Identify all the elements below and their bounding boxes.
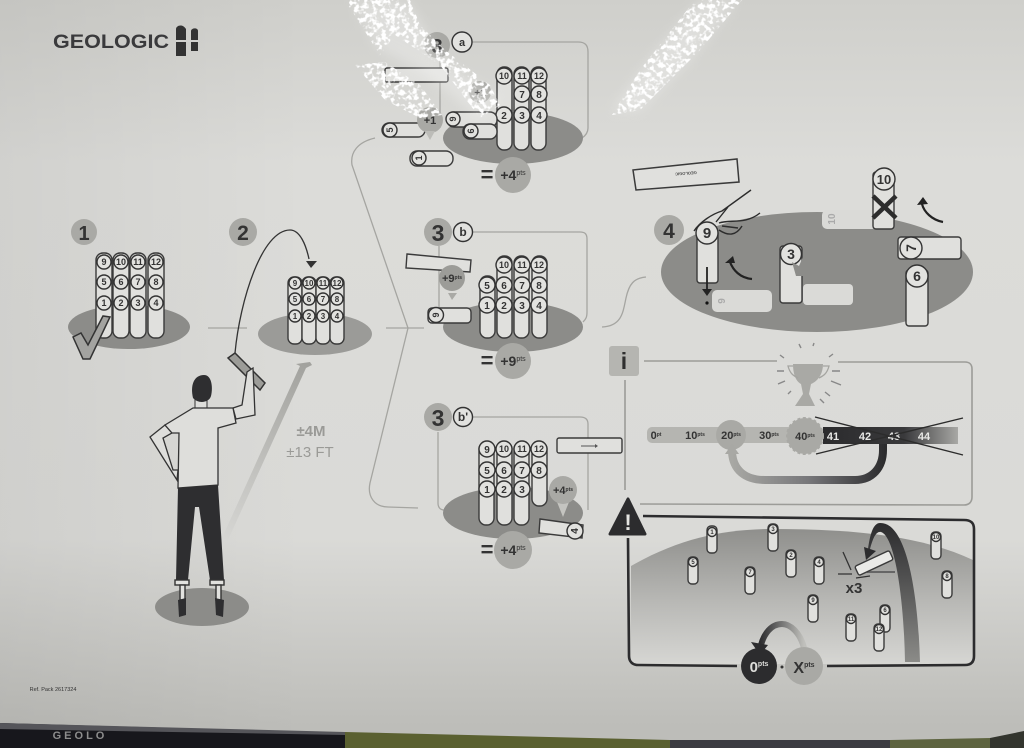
score bar: 30 [759,430,771,442]
branch connector lines [208,138,646,508]
pins remaining: 8 [536,281,542,292]
pins remaining: 10 [499,71,509,81]
score bar: 44 [918,431,931,443]
zero points circle [741,648,777,684]
check mark [73,316,110,359]
baton impact x3: x3 [846,580,862,597]
hand [694,190,760,234]
badge 3b: b [459,225,467,239]
pins remaining: 7 [519,466,525,477]
pins remaining: 11 [517,444,527,454]
distance label: ±13 FT [286,444,334,461]
pins remaining: 6 [501,281,507,292]
return arrow to zero [751,624,804,655]
pin 6: 6 [913,268,921,284]
ground ellipse [443,302,583,352]
ground ellipse [258,313,372,355]
scattered pins: 7 [748,570,752,576]
pins remaining: 4 [536,111,542,122]
panel frame [440,42,588,138]
partial text under the sheet: GEOLO [53,730,107,742]
distance arrow [222,362,312,540]
pins 1 to 12 [288,277,344,344]
fallen pins: 1 [414,155,424,161]
pins remaining: 5 [484,466,490,477]
scattered pins: 9 [811,598,815,604]
score bar: 0 [651,430,657,442]
pins remaining: 9 [484,445,490,456]
fallen pins [382,112,497,166]
scattered pins: 6 [883,608,887,614]
zero points circle: 0 [750,659,758,676]
trousers [176,485,224,580]
pins remaining: 8 [536,466,542,477]
pins remaining [479,441,547,525]
X points circle [785,647,823,685]
pin 10 crossed out [873,168,896,229]
big throw arc [864,523,920,662]
badge 3b prime: 3 [432,405,444,431]
info icon: i [621,348,627,374]
pins 1 to 12: 8 [153,277,159,287]
badge 3a: 3 [431,36,443,58]
score bar: pts [733,432,741,438]
pins 1 to 12: 10 [305,279,314,288]
score bar: pts [771,432,779,438]
pins 1 to 12: 9 [101,257,107,267]
reference code: Ref. Pack 2617324 [30,687,76,693]
pins 1 to 12: 12 [333,279,342,288]
pins remaining: 11 [517,260,527,270]
pins remaining: 2 [501,111,507,122]
warning panel: bust rule [610,499,974,685]
panel frame [628,516,974,666]
scattered pins: 11 [848,617,855,623]
score bar: pts [807,433,815,439]
+9 score marker: pts [455,275,462,281]
badge 4 [654,215,684,245]
+4 score marker: pts [566,487,573,493]
40 pts badge [787,418,823,454]
+1 score marker: +1 [424,115,436,127]
scattered pins: 5 [691,560,695,566]
pins 1 to 12: 2 [118,298,124,308]
raised arm [233,368,255,419]
score bar: 41 [827,431,839,443]
step 3b: several pins [406,218,587,379]
pin 9 being placed [696,222,718,283]
fallen pins: 9 [448,116,458,122]
pins remaining: 4 [536,301,542,312]
pins remaining: 7 [519,281,525,292]
pins remaining: 1 [484,485,490,496]
ghost pins: 9 [717,298,728,304]
baton [406,254,471,272]
pins 1 to 12: 11 [319,279,328,288]
bottom edge of sheet [0,723,1024,748]
step 4: stand pins back up [654,168,973,332]
fallen pin 9 [428,308,471,323]
+4 score marker: +4 [553,485,566,497]
pins 1 to 12: 10 [116,257,126,267]
baton [557,438,622,453]
result +4 pts: pts [516,545,526,552]
result +4 pts: +4 [500,167,516,183]
pins remaining: 10 [499,260,509,270]
scattered pins: 8 [945,574,949,580]
pins 1 to 12: 3 [135,298,141,308]
result +4 pts: pts [516,170,526,177]
baton impact x3 [838,550,895,597]
pins 1 to 12: 6 [307,295,312,304]
badge 2: 2 [237,222,249,245]
pins remaining: 1 [484,301,490,312]
X points circle: pts [804,662,815,669]
scattered pins [688,524,952,651]
zero points circle: pts [758,661,769,668]
pins remaining: 2 [501,301,507,312]
badge 4: 4 [663,220,675,243]
pins remaining: 5 [484,281,490,292]
ground ellipse [661,212,973,332]
pins 1 to 12: 1 [101,298,107,308]
pins remaining: 2 [501,485,507,496]
badge 3a: a [459,37,466,49]
ground ellipse [443,487,583,539]
pins remaining: 3 [519,485,525,496]
baton in hand [228,353,265,390]
X points circle: X [793,660,804,677]
pins 1 to 12: 9 [293,279,298,288]
pins 1 to 12: 5 [101,277,107,287]
panel frame [625,361,972,505]
step 3b prime: pin falls but stays [424,403,622,569]
arm on hip [150,425,178,480]
info icon [609,346,639,376]
+1 score marker upper [469,81,491,103]
pins remaining: 3 [519,111,525,122]
result +9 pts: +9 [500,353,516,369]
warning icon [610,499,645,535]
fallen pin 4: 4 [570,528,581,534]
pins remaining: 10 [499,444,509,454]
head [192,375,212,402]
fallen pin 4 [539,519,583,539]
pins 1 to 12: 7 [135,277,141,287]
step 2: throw [150,218,372,626]
pins 1 to 12: 11 [133,257,143,267]
score bar [647,418,958,454]
+9 score marker [439,265,465,300]
result +9 pts: pts [516,356,526,363]
pins 1 to 12: 12 [151,257,161,267]
score bar: 43 [888,431,900,443]
20 pts circle [716,420,746,450]
logo: Geologic [53,26,199,56]
result +4 pts: +4 [500,542,516,558]
baton [385,68,448,82]
info panel: scoring [609,343,972,505]
badge 3a [424,32,472,58]
ghost pins [712,210,877,312]
pins 1 to 12: 3 [321,312,326,321]
trophy [777,343,841,406]
baton with logo: GEOLOGIC [675,170,697,177]
ground ellipse [68,305,190,349]
panel frame [439,232,587,322]
pins remaining: 7 [519,90,525,101]
+4 score marker [549,476,577,517]
crossed out overrun [815,417,963,455]
result +4 pts: = [481,162,493,187]
fallen pin 7 [898,237,961,259]
ground ellipse [443,112,583,164]
pins 1 to 12: 4 [153,298,159,308]
pins 1 to 12 [96,253,164,338]
glare [345,0,742,118]
badge 3b prime [424,403,472,431]
+1 score marker upper: +1 [474,88,486,99]
pin 10 crossed out: 10 [877,172,891,187]
badge 1: 1 [78,223,90,245]
pin 3 with check [780,244,813,303]
fallen pins: 5 [385,127,395,133]
scattered pins: 1 [710,530,714,536]
pins 1 to 12: 7 [321,295,326,304]
distance label [286,423,334,461]
badge 3b [424,218,472,246]
+9 score marker: +9 [442,273,455,285]
pins remaining: 12 [534,71,544,81]
arrow down [702,267,712,305]
scattered pins: 3 [771,527,775,533]
score bar: 40 [795,431,807,443]
pins 1 to 12: 5 [293,295,298,304]
pins 1 to 12: 4 [335,312,340,321]
scattered pins: 2 [789,553,793,559]
pin 3 with check: 3 [787,246,795,262]
pins remaining: 6 [501,466,507,477]
distance label: ±4M [296,423,326,440]
fallen pins: 6 [466,128,476,134]
pins remaining [479,256,547,338]
score bar: 20 [721,430,733,442]
pins remaining: 3 [519,301,525,312]
pins 1 to 12: 2 [307,312,312,321]
pins remaining [496,67,547,150]
result +4 pts: = [481,537,493,562]
step 1: setup [68,219,190,359]
logo: Geologic: GEOLOGIC [53,32,169,53]
score bar: pt [657,432,662,438]
result +4 pts [481,531,532,569]
pins remaining: 12 [534,260,544,270]
throw trajectory arrow [235,230,317,353]
neck [195,396,207,409]
step 3a: knock one pin [382,32,588,193]
badge 3b: 3 [432,220,444,246]
curved arrow right [917,197,943,222]
result +9 pts: = [481,348,493,373]
result +9 pts [481,343,531,379]
score bar: 42 [859,431,871,443]
panel frame [438,417,588,510]
pins 1 to 12: 8 [335,295,340,304]
score bar: pts [697,432,705,438]
pins 1 to 12: 1 [293,312,298,321]
scattered pins: 4 [817,560,821,566]
baton with logo [633,159,739,190]
pin 9 being placed: 9 [703,225,711,242]
score bar: 10 [685,430,697,442]
separator dot [780,666,784,668]
curved arrow left [725,256,752,279]
pins 1 to 12: 6 [118,277,124,287]
pins remaining: 12 [534,444,544,454]
return arrow to 20 pts [725,444,883,480]
pins remaining: 11 [517,71,527,81]
ghost pins: 10 [827,213,838,225]
player figure [150,353,265,626]
+1 score marker [417,107,443,140]
badge 3b prime: b' [458,410,468,424]
scattered pins: 12 [876,627,883,633]
warning icon: ! [624,510,632,535]
scattered pins: 10 [933,535,940,541]
scattered ground [631,529,973,664]
fallen pin 7: 7 [903,244,919,252]
shirt [165,408,236,488]
result +4 pts [481,157,531,193]
pin 6 [906,265,928,326]
pins remaining: 8 [536,90,542,101]
badge 2 [229,218,257,246]
fallen pin 9: 9 [431,312,441,318]
